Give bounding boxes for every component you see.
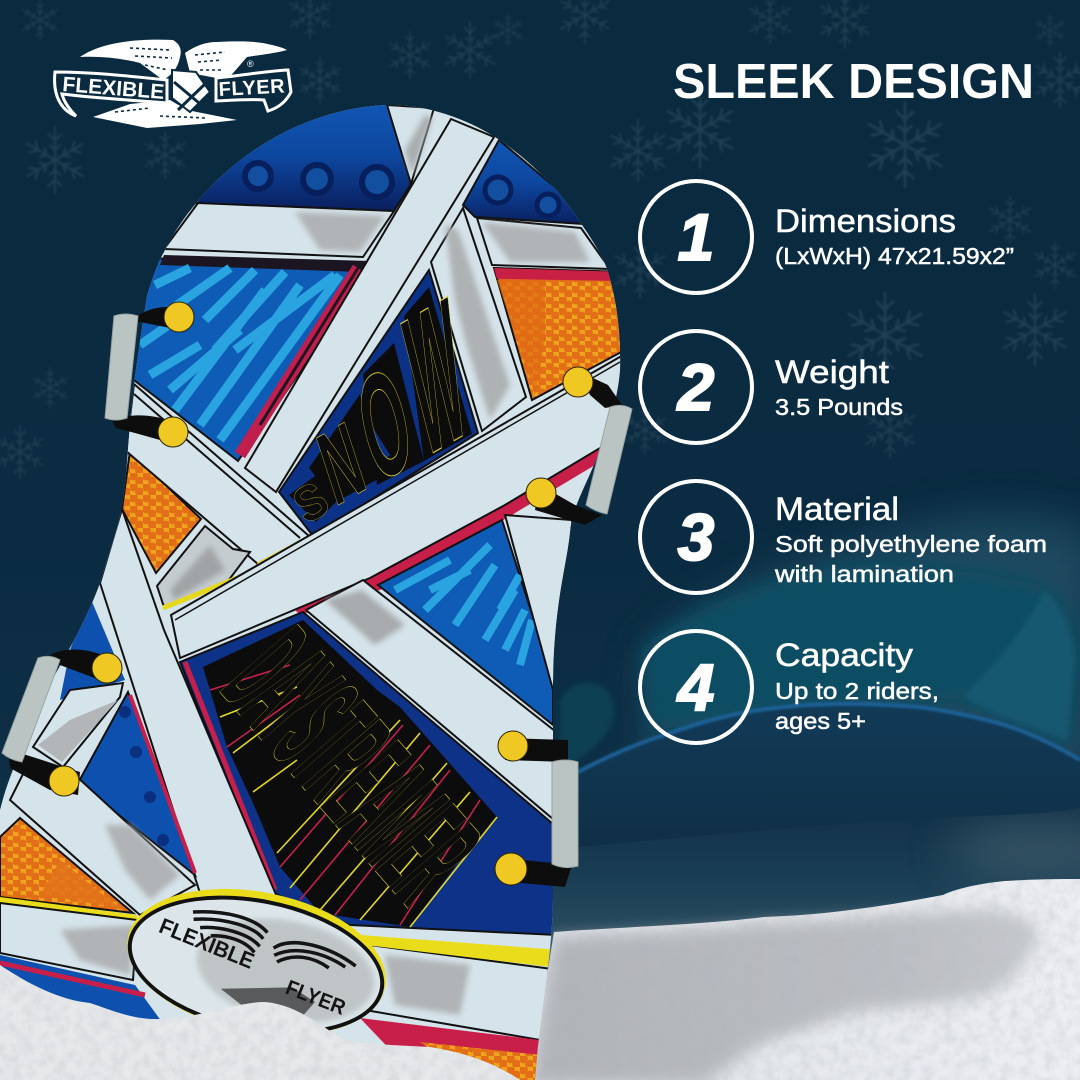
number badge 4: 4 (676, 650, 714, 724)
lower left blue panel (78, 692, 195, 875)
title: SLEEK DESIGN (673, 55, 1034, 109)
lower left white band (10, 760, 195, 915)
long white band (171, 354, 625, 658)
eagle legs (221, 987, 315, 1014)
vertical white band (431, 208, 526, 431)
dimensions heading: Dimensions (775, 203, 956, 239)
diagonal white band (245, 119, 494, 492)
upper left blue corner (60, 597, 125, 700)
red accent strip (290, 448, 600, 615)
lower right white band (306, 580, 560, 825)
feature 1: dimensions (640, 181, 1014, 293)
sled base (0, 100, 630, 1080)
lower bands (0, 903, 560, 1080)
left white band (126, 384, 309, 565)
handles, straps and pegs (2, 302, 632, 887)
straps (8, 307, 622, 887)
SNOW text: N (307, 401, 376, 528)
left banner (55, 72, 167, 116)
number badge 2 (640, 331, 752, 443)
upper left silver panel (33, 683, 123, 767)
SNOW text: S (284, 472, 338, 535)
right blue panel (378, 520, 553, 725)
yellow pegs (49, 302, 593, 885)
SNOW text: O (344, 333, 425, 515)
SNOW text: W (393, 254, 479, 499)
right banner (216, 70, 291, 111)
number badge 4 (640, 631, 752, 743)
small striped panel (157, 526, 305, 608)
oval logo (127, 888, 386, 1031)
capacity value: Up to 2 riders, (775, 678, 939, 704)
left blue panel (130, 255, 375, 461)
big lower panel (180, 601, 560, 935)
right orange panel (494, 268, 625, 400)
SNOW text (294, 296, 463, 521)
top right white band (477, 218, 610, 269)
oval logo: FLYER (282, 976, 349, 1020)
weight value: 3.5 Pounds (775, 394, 903, 420)
registered mark: ® (247, 59, 254, 69)
blurred snowboard (554, 704, 1080, 850)
top white band (164, 203, 394, 257)
background snowflakes (0, 0, 1080, 479)
foreground snow (0, 965, 520, 1080)
material value: Soft polyethylene foam (775, 531, 1047, 557)
capacity heading: Capacity (775, 637, 913, 673)
top panel with bolts (190, 100, 411, 211)
logo text: FLEXIBLE (62, 73, 165, 104)
lettering block (203, 620, 497, 927)
capacity value: ages 5+ (775, 708, 866, 734)
feature 4: capacity (640, 631, 939, 743)
vertical left band (100, 509, 277, 897)
top wedge band (387, 105, 434, 184)
feature 2: weight (640, 331, 903, 443)
brand logo: FLYER (218, 76, 286, 101)
material value: with lamination (774, 561, 954, 587)
SNOW panel (279, 254, 479, 536)
top right panel (462, 139, 582, 225)
weight heading: Weight (775, 354, 889, 390)
brand logo (55, 40, 291, 128)
number badge 3 (640, 481, 752, 593)
capacity value (775, 678, 939, 734)
snow ground right (530, 879, 1080, 1080)
eagle wings (192, 910, 357, 970)
eagle wings (80, 40, 287, 128)
lower left orange panel (0, 818, 137, 922)
fog below board (550, 800, 1080, 940)
snow shadow (530, 910, 1039, 1080)
number badge 1: 1 (678, 200, 714, 274)
lettering outlines (210, 665, 497, 927)
wing speckle (115, 48, 225, 118)
sled (0, 100, 632, 1080)
number badge 2: 2 (676, 350, 715, 424)
banner text: FLEXIBLE (156, 913, 258, 974)
right white strip (505, 515, 572, 700)
feature 3: material (640, 481, 1047, 593)
rider body (640, 565, 1076, 741)
SNOW lettering blocks (289, 287, 472, 522)
number badge 3: 3 (678, 500, 714, 574)
blurred snowboarder background (550, 515, 1080, 940)
dimensions value: (LxWxH) 47x21.59x2” (775, 243, 1014, 269)
eagle body (172, 70, 210, 112)
left orange panel (122, 451, 201, 573)
haze (650, 515, 1080, 780)
foam handles (2, 314, 632, 868)
material heading: Material (775, 491, 899, 527)
material value (774, 531, 1047, 587)
number badge 1 (640, 181, 752, 293)
